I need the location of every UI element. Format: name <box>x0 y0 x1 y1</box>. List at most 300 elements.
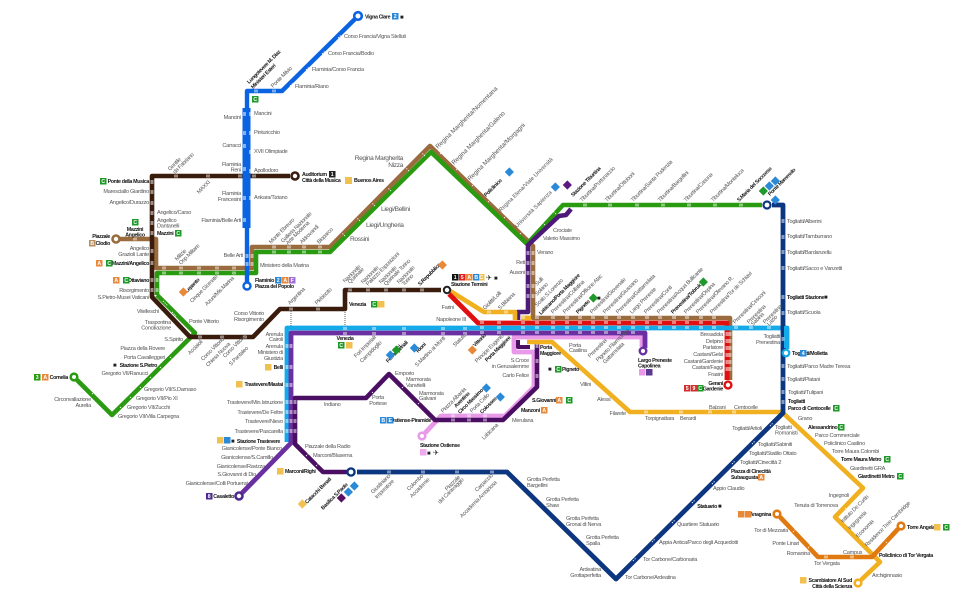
badge letters: A <box>114 278 118 284</box>
labels: Regina Margherita and Tiburtina: Regina Margherita/Morgagni <box>466 122 527 182</box>
labels: Togliatti: Togliatti <box>763 334 780 340</box>
terminal ring: Largo Preneste <box>640 348 646 354</box>
labels: Prenestina: Prenestina/Acqua Bullicante <box>656 267 705 315</box>
labels: green 3 and Vatican: Gregorio VII/Pio XI <box>136 396 178 402</box>
labels: Togliatti: Togliatti/Artioli <box>732 426 762 432</box>
labels: north-west dark brown and light brown: Monte Ebreuro <box>268 217 296 245</box>
labels: Ostiense and San Giovanni <box>390 327 758 449</box>
line: dark brown 1 <box>152 176 441 337</box>
labels: north-west dark brown and light brown: Buenos Aires <box>354 178 384 184</box>
labels: green 3 and Vatican: Gregorio VII/Villa Carpegna <box>118 414 180 420</box>
labels: north-west blue line: Flaminia/Corso Francia <box>312 67 365 73</box>
labels: south-east yellow and orange: Grano <box>798 416 812 422</box>
labels: north-west blue line: Pinturicchio <box>254 130 280 136</box>
labels: Prenestina: Prenestina/Conti <box>643 285 674 315</box>
badge letters: C <box>834 406 838 412</box>
labels: central Repubblica and Nazionale: Torino <box>401 273 415 287</box>
badges: green C squares <box>100 96 950 530</box>
badge letters: C <box>556 367 560 373</box>
badge letters: 1 <box>454 275 457 281</box>
labels: Trastevere branch: Trastevere/De Feltre <box>237 410 283 416</box>
labels: Trastevere branch: Gianicolense/S.Camillo <box>221 455 273 461</box>
badge letters: C <box>133 220 137 226</box>
labels: central Repubblica and Nazionale: Quirinale <box>347 267 366 285</box>
labels: Regina Margherita and Tiburtina: Crociate <box>553 228 572 234</box>
labels: Ostiense and San Giovanni: Porta <box>540 345 552 351</box>
labels: Trastevere branch: Trastevere/Nievo <box>245 419 283 425</box>
labels: south navy line: Grotta Perfetta <box>566 516 600 522</box>
badge letters: B <box>474 275 478 281</box>
labels: south-east yellow and orange: Giardinetti GRA <box>850 466 886 472</box>
labels: Trastevere branch: Trastevere/Pascarella <box>234 429 284 435</box>
labels: Ostiense and San Giovanni: Filarete <box>610 411 626 417</box>
badge letters: 5 <box>686 386 689 392</box>
terminal ring: Auditorium <box>292 172 298 180</box>
badge letters: C <box>898 474 902 480</box>
labels: Ostiense and San Giovanni: S.Croce <box>511 358 529 364</box>
labels: south navy line: Spalla <box>586 541 601 547</box>
labels: north-west blue line: Reni <box>231 168 241 174</box>
labels: Togliatti: Subaugusta <box>731 475 758 481</box>
labels: Regina Margherita and Tiburtina: Verano <box>537 250 553 256</box>
labels: north-west blue line <box>201 14 406 290</box>
labels: Togliatti: Parco di Centocelle <box>788 406 831 412</box>
labels: south-east yellow and orange <box>750 416 935 590</box>
labels: south navy line: Grottaperfetta <box>570 573 602 579</box>
labels: Trastevere branch: Portese <box>369 401 387 407</box>
labels: Togliatti: Togliatti/Bardanzellu <box>787 250 832 256</box>
labels: Regina Margherita and Tiburtina: Liegi/Ungheria <box>366 222 404 229</box>
labels: south-east yellow and orange: Ponte Linari <box>772 541 799 547</box>
labels: Prenestina: Prenestina/Cesconi <box>732 290 767 325</box>
terminal ring: Cornelia <box>71 374 77 380</box>
labels: south-east yellow and orange: Ingegnoli <box>829 493 849 499</box>
labels: Regina Margherita and Tiburtina: Università Sapienza <box>514 189 554 229</box>
labels: Regina Margherita and Tiburtina <box>350 85 798 276</box>
terminal ring: Togliatti Molletta <box>783 350 789 356</box>
icons: locks and planes: ■ <box>113 363 117 369</box>
labels: green 3 and Vatican: Traspontina <box>145 320 172 326</box>
labels: Trastevere branch: Gianicolense/Ponte Bianco <box>222 446 282 452</box>
labels: north-west blue line: Flaminia <box>222 162 242 168</box>
maroon stub <box>518 340 530 347</box>
labels: north-west dark brown and light brown: Angelico <box>157 218 176 224</box>
labels: north-west dark brown and light brown: Clodio <box>96 241 111 247</box>
labels: Ostiense and San Giovanni: Gattamelata <box>602 341 627 365</box>
labels: central Repubblica and Nazionale: Statuto <box>452 333 468 348</box>
labels: central Repubblica and Nazionale: Nazionale <box>396 265 416 285</box>
labels: south navy line: Giustiniano <box>370 473 392 495</box>
badge letters: A <box>97 261 101 267</box>
diagonal station ticks <box>92 35 889 561</box>
labels: north-west blue line: Vigna Clare <box>365 14 391 20</box>
icons: locks and planes: ■ <box>824 295 828 301</box>
labels: north-west dark brown and light brown: Ottaviano <box>128 278 150 284</box>
labels: central Repubblica and Nazionale: Nazionale <box>378 265 398 285</box>
labels: south-east yellow and orange: Campus <box>843 550 863 556</box>
labels: green 3 and Vatican <box>50 286 334 420</box>
labels: green 3 and Vatican: Gregorio VII/Zucchi <box>127 405 170 411</box>
labels: Ostiense and San Giovanni: Pigneto Filarmonica <box>595 327 632 363</box>
labels: north-west blue line: Piazza del Popolo <box>255 284 295 290</box>
badge letters: C <box>176 231 180 237</box>
line: blue 2 <box>246 19 355 282</box>
labels: north-west blue line: Mancini <box>224 115 241 121</box>
labels: Trastevere branch: Catacchi Benati <box>304 476 333 505</box>
labels: Trastevere branch: Vanvitelli <box>406 383 425 389</box>
labels: Prenestina: Prenestina <box>746 303 768 325</box>
labels: Togliatti: Togliatti/Cinecittà 2 <box>740 460 781 466</box>
labels: south navy line: Grotta Perfetta <box>527 477 561 483</box>
labels: south navy line: Colombo <box>406 474 425 492</box>
labels: south navy line: Ardeatina <box>579 567 602 573</box>
labels: south navy line: Bargellini <box>527 483 547 489</box>
labels: central Repubblica and Nazionale: Fori Imperiali <box>353 335 378 359</box>
labels: south navy line: Carpaccio <box>474 473 495 493</box>
labels: Ostiense and San Giovanni: Alessi <box>597 397 610 403</box>
labels: Prenestina: Castani/Gelsi <box>693 352 723 358</box>
labels: south navy line: Accademie <box>409 477 431 499</box>
labels: Trastevere branch: Gianicolense/Colli Portuensi <box>186 481 248 487</box>
badge letters: 3 <box>36 375 39 381</box>
labels: north-west blue line: Corso Francia/Bodio <box>328 51 374 57</box>
labels: Trastevere branch: Marconi/Blaserna <box>313 453 353 459</box>
labels: Trastevere branch: Stazione Trastevere <box>237 439 280 445</box>
labels: Prenestina: Gardenie <box>703 386 723 392</box>
labels: north-west dark brown and light brown: Arte Moderna <box>285 220 312 246</box>
labels: central Repubblica and Nazionale: Fori Imperiali <box>385 339 410 364</box>
labels: south-east yellow and orange: Policlinico di Tor Vergata <box>879 553 933 559</box>
labels: south navy line: Shaw <box>546 503 560 509</box>
labels: Trastevere branch: Giustizia <box>264 356 284 362</box>
badge letters: B <box>381 418 385 424</box>
labels: Trastevere branch: S.Giovanni di Dio <box>217 472 256 478</box>
labels: Togliatti: Togliatti/Alberini <box>787 219 821 225</box>
labels: south-east yellow and orange: Alessandrino <box>808 425 838 431</box>
badge letters: A <box>759 475 763 481</box>
labels: north-west dark brown and light brown: Angelico <box>125 232 146 238</box>
labels: south-east yellow and orange: Torre Maura Metro <box>841 457 882 463</box>
labels: central Repubblica and Nazionale: Nazionale <box>342 264 362 284</box>
labels: green 3 and Vatican: Corso Vittorio <box>222 334 248 359</box>
labels: north-west blue line: Flaminia/Riano <box>295 84 329 90</box>
badge letters: C <box>698 386 702 392</box>
labels: Ostiense and San Giovanni: in Gerusalemme <box>492 364 529 370</box>
labels: Trastevere branch: Piazzale della Radio <box>305 444 350 450</box>
badges: yellow squares <box>217 177 940 584</box>
labels: north-west blue line: XVII Olimpiade <box>254 149 288 155</box>
cyan spur beside navy <box>784 326 789 348</box>
icons: locks and planes: ■ <box>400 15 404 21</box>
labels: north-west dark brown and light brown: Lepanto <box>184 277 202 294</box>
line: green C <box>157 152 762 295</box>
labels: south-east yellow and orange: Policlinico Casilino <box>824 441 865 447</box>
labels: Regina Margherita and Tiburtina: Rossini <box>350 236 370 243</box>
labels: Ostiense and San Giovanni: Aventino <box>453 390 472 409</box>
labels: north-west dark brown and light brown: Grazioli Lante <box>118 252 149 258</box>
labels: south-east yellow and orange: Anagnina <box>750 512 771 518</box>
icons: locks and planes: ■ <box>494 276 498 282</box>
labels: south-east yellow and orange: Giardinetti Metro <box>858 474 896 480</box>
labels: Ostiense and San Giovanni: Circo Massimo <box>457 387 486 415</box>
labels: north-west blue line: Ponte Milvio <box>270 66 294 89</box>
labels: Prenestina: Delpino <box>706 339 723 345</box>
labels: south-east yellow and orange: Archiginnasio <box>872 573 902 579</box>
icons: locks and planes: ■ <box>231 439 235 445</box>
icons: locks and planes: ■ <box>427 451 431 457</box>
labels: Prenestina: Sulli <box>534 277 545 287</box>
badge letters: 2 <box>394 14 397 20</box>
labels: central Repubblica and Nazionale: Campidoglio <box>359 340 383 364</box>
badge letters: A <box>557 398 561 404</box>
labels: north-west blue line: Ankara/Tiziano <box>254 195 287 201</box>
badge letters: C <box>339 343 343 349</box>
labels: north-west dark brown and light brown: Piazzale <box>92 234 110 240</box>
labels: central Repubblica and Nazionale: S.Martino ai Monti <box>414 336 447 368</box>
labels: north-west dark brown and light brown: Mazzini <box>157 231 174 237</box>
terminal ring: Flaminio <box>244 282 250 290</box>
labels: south navy line: del Caravaggio <box>437 477 465 505</box>
labels: Prenestina: Parlatore <box>703 345 723 351</box>
labels: green 3 and Vatican: Acciaioli <box>187 339 204 356</box>
labels: Trastevere branch: Emporio <box>395 371 414 377</box>
labels: Togliatti <box>625 219 851 581</box>
labels: Prenestina: Prenestina <box>762 303 784 325</box>
labels: Regina Margherita and Tiburtina: Reti <box>516 260 525 266</box>
labels: Prenestina: Prenestina/Gattamelata <box>615 273 658 315</box>
labels: Trastevere branch: Casaletto <box>213 494 235 500</box>
badge letters: 8 <box>208 494 211 500</box>
labels: Togliatti: Piazza di Cinecittà <box>731 469 771 475</box>
labels: north-west dark brown and light brown: Risorgimento <box>119 288 149 294</box>
labels: green 3 and Vatican: S.Pantaleo <box>228 346 250 367</box>
labels: green 3 and Vatican: Plebiscito <box>314 287 334 306</box>
labels: south-east yellow and orange: Romanina <box>787 551 811 557</box>
labels: Ostiense and San Giovanni: Merulana <box>512 418 534 424</box>
labels: north-west dark brown and light brown: Mazzini/Angelico <box>112 261 150 267</box>
labels: north-west dark brown and light brown: Ponte della Musica <box>108 179 149 185</box>
labels: green 3 and Vatican: Piazza della Rovere <box>120 346 165 352</box>
labels: Togliatti: Togliatti/Statilio Ottato <box>749 451 797 457</box>
labels: green 3 and Vatican: Argentina <box>287 286 307 306</box>
labels: Prenestina: Bresadola <box>700 332 724 338</box>
labels: Togliatti: Quartiere Statuario <box>677 522 719 528</box>
labels: Regina Margherita and Tiburtina: Tiburtina/Monteluca <box>710 167 746 203</box>
labels: north-west blue line: Lungotevere M. Diaz <box>246 49 283 85</box>
labels: south-east yellow and orange: Tor Vergata <box>814 561 841 567</box>
labels: Ostiense and San Giovanni: Colosseo <box>479 396 499 415</box>
badge letters: F <box>291 278 294 284</box>
labels: green 3 and Vatican: Stazione S.Pietro <box>120 363 158 369</box>
line: maroon Marconi to Porta Maggiore <box>295 340 537 472</box>
labels: Trastevere branch: Indiano <box>324 402 341 408</box>
labels: Trastevere branch <box>186 332 445 511</box>
badge letters: A <box>467 275 471 281</box>
line: red <box>449 294 727 380</box>
labels: north-west dark brown and light brown: Dantanelli <box>157 224 179 230</box>
labels: green 3 and Vatican: Corso Vittorio <box>200 337 226 362</box>
labels: Regina Margherita and Tiburtina: Nizza <box>388 162 404 169</box>
labels: Trastevere branch: Trastevere/Min.Istruzione <box>227 400 283 406</box>
labels: south-east yellow and orange: Residence Tree Cambridge <box>864 500 912 548</box>
terminal ring: Piazzale Clodio <box>112 236 120 242</box>
labels: green 3 and Vatican: Chiesa Nuova <box>205 341 233 368</box>
labels: green 3 and Vatican: Conciliazione <box>141 326 171 332</box>
labels: north-west dark brown and light brown: da Fabriano <box>172 152 196 175</box>
yellow short link <box>521 316 531 320</box>
labels: south-east yellow and orange: Scambiatore Al Sud <box>808 578 852 584</box>
labels: central Repubblica and Nazionale: Venezia <box>337 336 354 342</box>
labels: central Repubblica and Nazionale: Farini <box>442 305 454 311</box>
labels: north-west dark brown and light brown: S.Pietro-Musei Vaticani <box>97 295 149 301</box>
line: green 3 to Cornelia <box>77 295 195 415</box>
icons: locks and planes: ✈ <box>486 274 492 282</box>
labels: Ostiense and San Giovanni: Prenestina <box>587 337 609 359</box>
labels: south-east yellow and orange: Torre Maura Colombi <box>832 449 879 455</box>
terminal ring: Basilica S.Paolo <box>347 468 355 476</box>
badge letters: C <box>253 97 257 103</box>
labels: Togliatti: Togliatti/Sabiniti <box>758 442 792 448</box>
labels: north-west blue line: Belle Arti <box>224 253 243 259</box>
badge letters: 9 <box>693 386 696 392</box>
labels: north-west blue line: Corso Francia/Vigna Stelluti <box>344 34 406 40</box>
labels: central Repubblica and Nazionale: Stazione Termini <box>451 282 488 288</box>
vertical station ticks <box>150 113 784 432</box>
labels: Ostiense and San Giovanni: S.Giovanni <box>532 398 557 404</box>
labels: Regina Margherita and Tiburtina: Ausoni <box>510 270 525 276</box>
labels: Prenestina: Solano <box>534 282 550 297</box>
labels: Regina Margherita and Tiburtina: Tiburtina/Ottoboni <box>604 171 636 203</box>
terminal ring: Termini <box>444 287 450 293</box>
badges: brown, black, purple and others <box>34 171 697 503</box>
labels: Ostiense and San Giovanni: Ostiense-Piramide <box>390 418 431 424</box>
labels: Togliatti: Romanisti <box>775 430 797 436</box>
labels: Togliatti: Statuario <box>697 504 718 510</box>
labels: Trastevere branch: Porta <box>372 395 385 401</box>
line: yellow main <box>527 342 880 580</box>
labels: north-west blue line: Apollodoro <box>254 168 278 174</box>
labels: north-west dark brown and light brown: Azuni/Mis.Marina <box>204 275 237 307</box>
terminal ring: Stazione Ostiense <box>419 433 425 439</box>
labels: central Repubblica and Nazionale: Venezia <box>349 302 366 308</box>
labels: Trastevere branch: Marmorata <box>419 391 445 397</box>
labels: Regina Margherita and Tiburtina: Tiburtina/Bargellini <box>657 170 690 203</box>
labels: green 3 and Vatican: S.Spirito <box>164 337 183 343</box>
labels: central Repubblica and Nazionale: S.Bibiana <box>497 291 517 311</box>
labels: Trastevere branch: Arenula <box>266 332 284 338</box>
labels: Ostiense and San Giovanni: Berardi <box>680 416 696 422</box>
labels: north-west dark brown and light brown: Osp.Militare <box>178 243 201 266</box>
labels: Prenestina: Castani/Faggi <box>692 365 723 371</box>
labels: south navy line: Accademia Ambiziosa <box>459 479 499 519</box>
terminal ring: Gerani <box>725 382 731 388</box>
labels: south navy line <box>370 473 620 579</box>
labels: Regina Margherita and Tiburtina: Regina Margherita/Nomentana <box>434 85 500 150</box>
labels: Prenestina: Largo Preneste <box>629 287 658 315</box>
labels: Prenestina: Prenestina/Giovenale <box>589 277 628 315</box>
labels: north-west dark brown and light brown: Bioparco <box>316 227 335 245</box>
labels: Regina Margherita and Tiburtina: S.Maria del Soccorso <box>736 165 774 203</box>
labels: north-west blue line: Flaminia <box>222 191 242 197</box>
labels: Prenestina: Castani/Gardenie <box>684 359 723 365</box>
labels: Ostiense and San Giovanni: Manzoni <box>521 408 541 414</box>
labels: north-west blue line: Francesini <box>218 197 241 203</box>
labels: Trastevere branch: Gianicolense/Ravizza <box>217 464 266 470</box>
labels: south navy line: Grotta Perfetta <box>586 535 620 541</box>
badge letters: C <box>124 278 128 284</box>
labels: Regina Margherita and Tiburtina: Regina Elena/Viale Università <box>498 156 555 213</box>
labels: Ostiense and San Giovanni: Balzani <box>709 405 725 411</box>
labels: Ostiense and San Giovanni: Capolinea <box>638 364 661 370</box>
labels: south navy line: Piazzale <box>444 475 462 492</box>
labels: Prenestina: Gerani <box>708 381 724 387</box>
terminal ring: Casaletto <box>236 492 242 500</box>
badges: orange A squares <box>42 260 764 518</box>
line: violet 8 <box>242 333 645 493</box>
labels: north-west dark brown and light brown: Città della Musica <box>302 178 341 184</box>
labels: Ostiense and San Giovanni: Maggiore <box>540 351 561 357</box>
labels: north-west dark brown and light brown: Gentile <box>167 157 183 172</box>
labels: Prenestina: Prenestina/Olevano R. <box>695 275 736 315</box>
labels: Prenestina: Pigneto <box>575 298 592 315</box>
icons: locks and planes: ✈ <box>433 449 439 457</box>
central band station ticks <box>344 316 770 336</box>
labels: Prenestina: Frasini <box>708 372 723 378</box>
labels: south-east yellow and orange: Parco Commerciale <box>815 433 860 439</box>
labels: central Repubblica and Nazionale <box>337 252 517 368</box>
terminal ring: Vigna Clare <box>354 12 362 20</box>
labels: south-east yellow and orange: Torre Angela <box>907 525 935 531</box>
labels: Trastevere branch: Belli <box>274 365 284 371</box>
labels: north-west dark brown and light brown: Mazzini <box>127 227 144 233</box>
labels: Togliatti: Togliatti/Sacco e Vanzetti <box>787 266 842 272</box>
terminal ring: Torre Angela <box>898 523 904 529</box>
labels: Regina Margherita and Tiburtina: Ponte Mammolo <box>767 167 798 197</box>
labels: Regina Margherita and Tiburtina: Valerio Massimo <box>543 236 580 242</box>
labels: central Repubblica and Nazionale: Palazzo Esposizioni <box>365 252 401 287</box>
labels: Prenestina <box>534 267 784 392</box>
labels: green 3 and Vatican: Circonvallazione <box>54 397 91 403</box>
labels: Prenestina: Labicano/Porta Maggiore <box>538 273 582 316</box>
terminal ring: Anagnina <box>774 511 780 517</box>
labels: Togliatti: Togliatti Stazione <box>787 295 825 301</box>
terminal ring: Scambiatore <box>855 580 861 586</box>
badge letters: C <box>839 425 843 431</box>
labels: Trastevere branch: Marmorata <box>406 377 432 383</box>
badge letters: B <box>90 241 94 247</box>
labels: Prenestina: Prenestina/Collatina <box>550 279 587 315</box>
badge letters: 4 <box>802 351 805 357</box>
labels: south-east yellow and orange: Istituto De Curtis <box>840 494 871 524</box>
labels: Prenestina: Scalo S.Lorenzo <box>534 278 565 308</box>
labels: Trastevere branch: Galvani <box>419 396 436 402</box>
labels: central Repubblica and Nazionale: Porta Maggiore <box>484 335 512 363</box>
labels: Ostiense and San Giovanni: Labicana <box>481 422 501 441</box>
labels: north-west blue line: Ministeri Esteri <box>250 63 278 90</box>
labels: north-west dark brown and light brown <box>92 152 384 307</box>
labels: green 3 and Vatican: Gregorio VII/S.Damaso <box>144 387 196 393</box>
labels: Regina Margherita and Tiburtina: Regina Margherita <box>355 155 404 162</box>
badge letters: 2 <box>277 278 280 284</box>
labels: north-west dark brown and light brown: Angelico/Carso <box>157 210 191 216</box>
labels: north-west dark brown and light brown: Angelico/Durazzo <box>109 200 149 206</box>
labels: green 3 and Vatican: Vitelleschi <box>137 309 159 315</box>
badge letters: 1 <box>331 172 334 178</box>
labels: north-west blue line: Carracci <box>222 143 241 149</box>
icons: locks and planes <box>113 15 828 510</box>
labels: south navy line: Grotta Perfetta <box>546 497 580 503</box>
labels: Togliatti: Prenestina <box>756 340 781 346</box>
